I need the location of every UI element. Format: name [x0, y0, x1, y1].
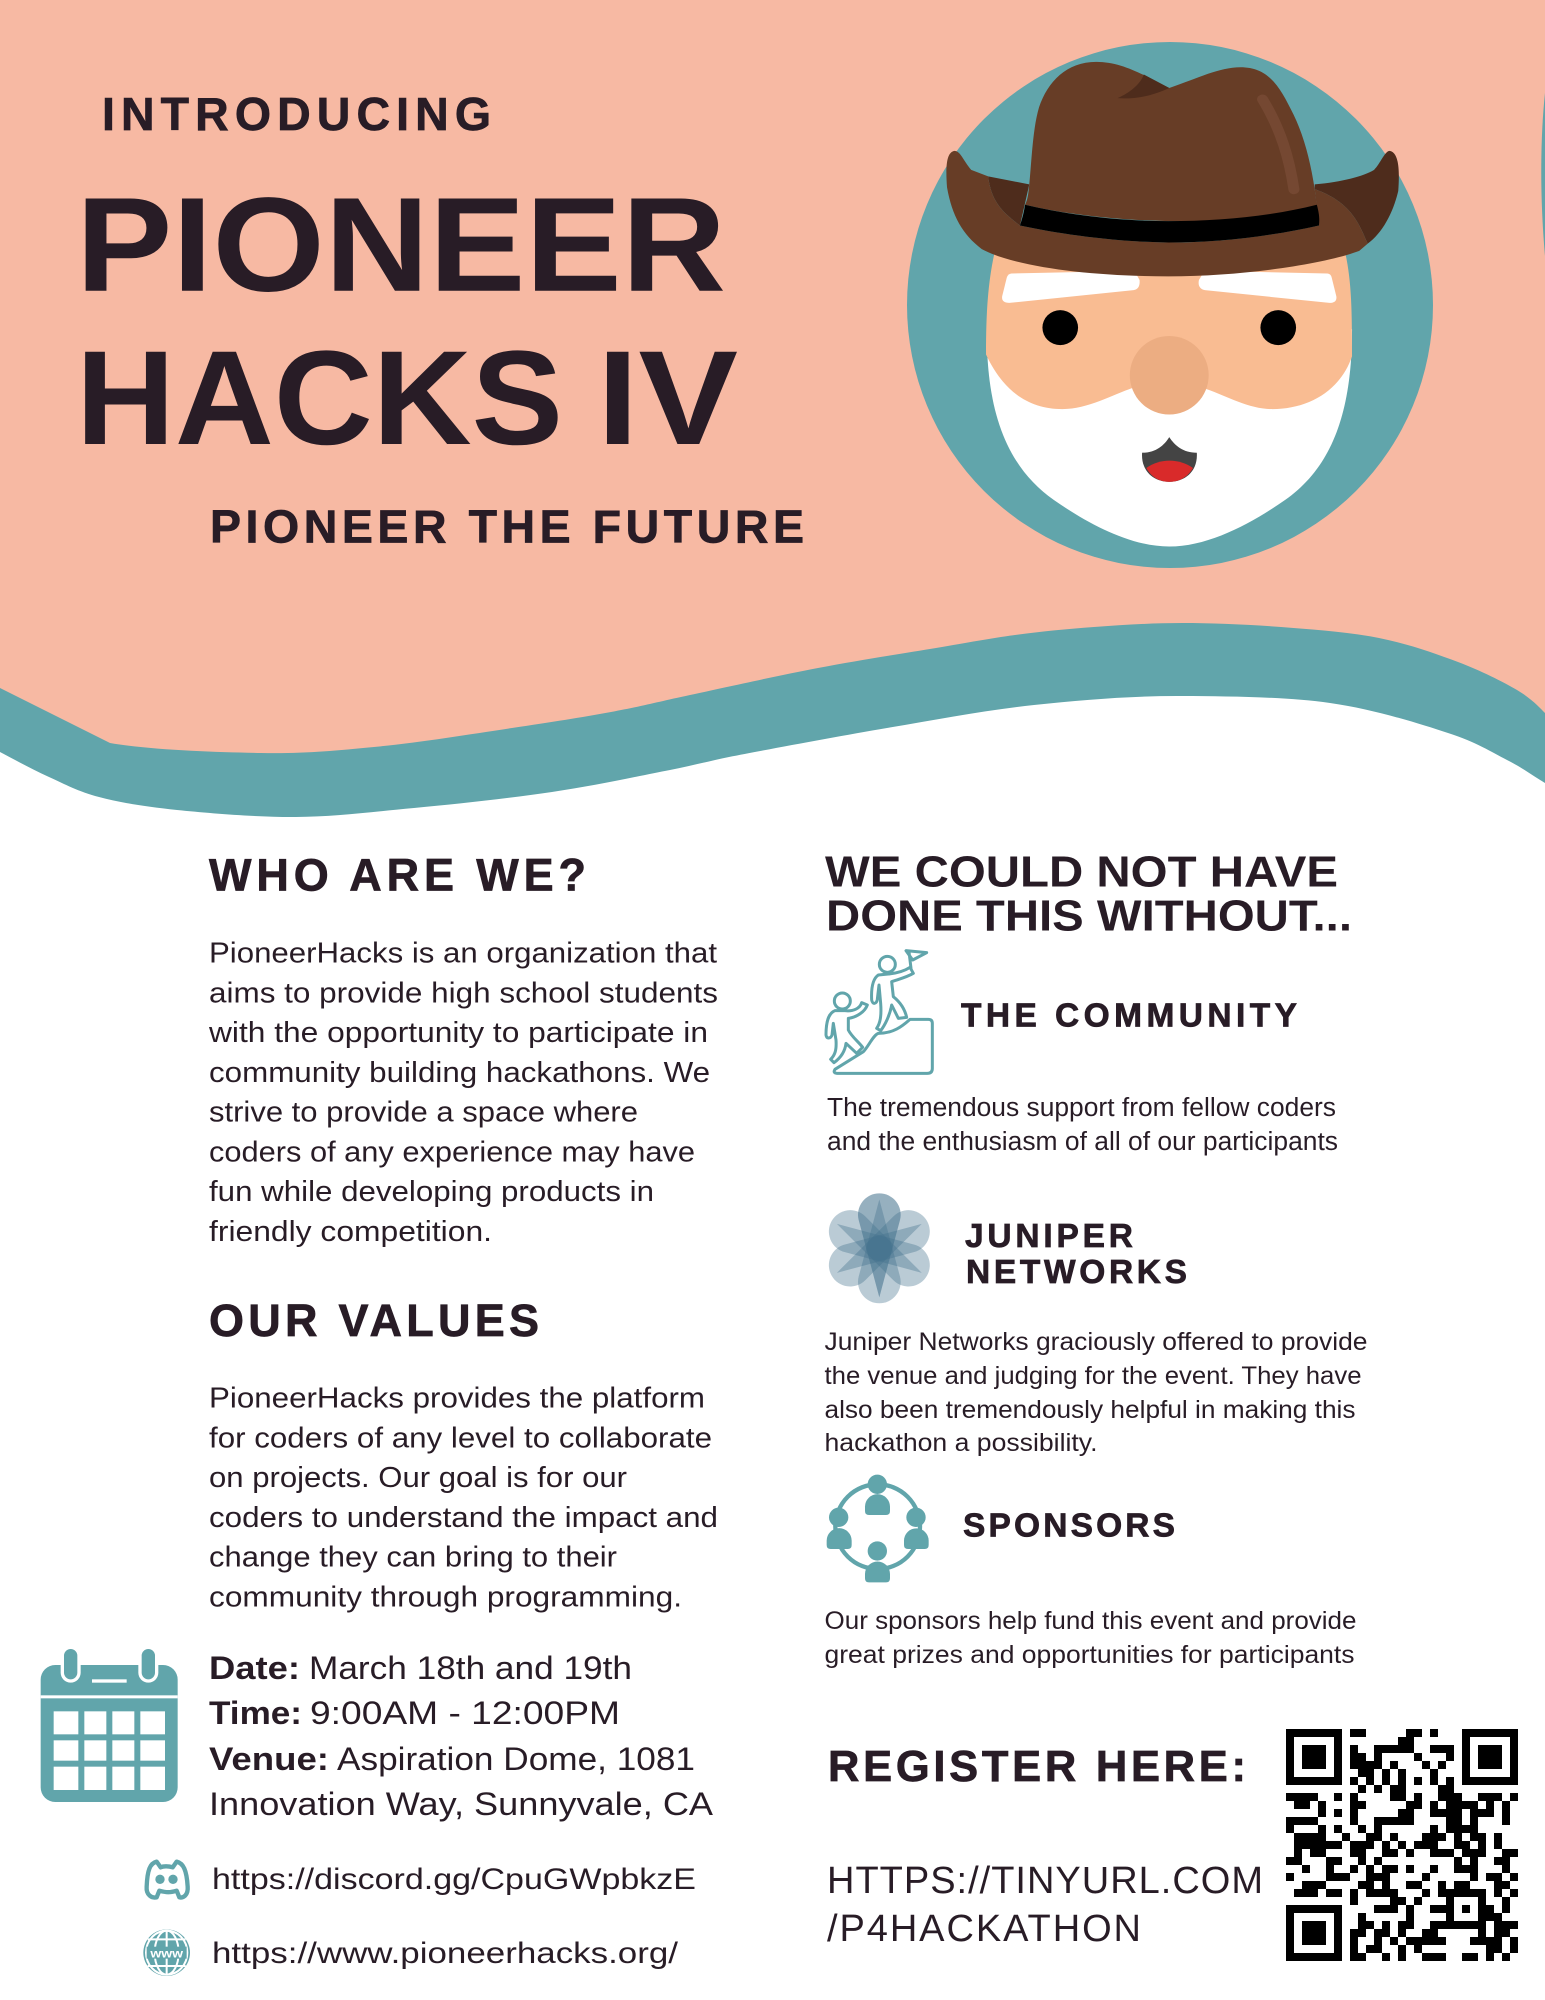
- icon: globe: [143, 1929, 190, 1976]
- event details: Innovation Way, Sunnyvale, CA: [209, 1786, 714, 1822]
- event details: Venue:: [209, 1741, 329, 1777]
- paragraph: sponsors: great prizes and opportunities for participants: [824, 1641, 1354, 1669]
- paragraph: who are we: [208, 938, 718, 1248]
- registration url: [827, 1860, 1263, 1950]
- event details: Aspiration Dome, 1081: [337, 1741, 695, 1777]
- paragraph: the community: and the enthusiasm of all of our participants: [827, 1128, 1338, 1156]
- paragraph: our values: on projects. Our goal is for our: [209, 1462, 627, 1494]
- decorative teal sliver at right edge: [1541, 93, 1545, 256]
- event details: March 18th and 19th: [309, 1650, 632, 1686]
- discord link: https://discord.gg/CpuGWpbkzE: [212, 1863, 696, 1896]
- event details: [209, 1650, 714, 1822]
- paragraph: the community: The tremendous support from fellow coders: [827, 1094, 1336, 1122]
- subheading: sponsors: SPONSORS: [963, 1508, 1175, 1544]
- subheading: juniper networks: NETWORKS: [966, 1254, 1187, 1291]
- icon: sponsors network: [827, 1475, 929, 1582]
- paragraph: our values: community through programming.: [209, 1581, 682, 1613]
- heading: acknowledgements: WE COULD NOT HAVE: [825, 849, 1338, 897]
- paragraph: juniper networks: Juniper Networks graciously offered to provide: [824, 1328, 1368, 1356]
- heading: register here: REGISTER HERE:: [828, 1743, 1246, 1791]
- paragraph: juniper networks: hackathon a possibility.: [824, 1429, 1098, 1457]
- paragraph: our values: coders to understand the impact and: [209, 1502, 718, 1534]
- title: IV: [597, 324, 738, 473]
- icon: juniper flower logo: [821, 1193, 938, 1303]
- paragraph: our values: [209, 1382, 718, 1613]
- paragraph: juniper networks: [824, 1328, 1368, 1457]
- paragraph: who are we: friendly competition.: [209, 1216, 492, 1248]
- paragraph: sponsors: Our sponsors help fund this event and provide: [824, 1607, 1356, 1635]
- paragraph: our values: change they can bring to their: [209, 1542, 617, 1574]
- title: [76, 171, 738, 473]
- paragraph: the community: [827, 1094, 1338, 1156]
- event details: Date:: [209, 1650, 300, 1686]
- icon: discord: [147, 1862, 188, 1898]
- icon: globe: www: [149, 1946, 184, 1960]
- paragraph: juniper networks: also been tremendously helpful in making this: [824, 1396, 1356, 1424]
- event details: 9:00AM - 12:00PM: [310, 1695, 620, 1731]
- title: HACKS: [76, 324, 563, 473]
- heading: our values: OUR VALUES: [209, 1295, 539, 1346]
- intro label: INTRODUCING: [102, 88, 491, 140]
- mascot: pioneer face with hat: [907, 42, 1433, 568]
- paragraph: who are we: aims to provide high school students: [209, 977, 718, 1009]
- paragraph: sponsors: [824, 1607, 1356, 1669]
- paragraph: juniper networks: the venue and judging for the event. They have: [824, 1362, 1362, 1390]
- paragraph: our values: PioneerHacks provides the platform: [209, 1382, 705, 1414]
- icon: climbers helping: [826, 951, 932, 1073]
- paragraph: who are we: PioneerHacks is an organization that: [209, 938, 717, 970]
- icon: calendar: [41, 1647, 178, 1802]
- paragraph: who are we: coders of any experience may have: [209, 1136, 695, 1168]
- teal wave band: [0, 600, 1545, 817]
- subheading: juniper networks: [965, 1218, 1187, 1291]
- registration url: /P4HACKATHON: [827, 1908, 1141, 1950]
- heading: acknowledgements: [825, 849, 1352, 941]
- subheading: the community: THE COMMUNITY: [961, 998, 1297, 1035]
- paragraph: our values: for coders of any level to collaborate: [209, 1422, 712, 1454]
- paragraph: who are we: fun while developing products in: [209, 1176, 654, 1208]
- paragraph: who are we: community building hackathons. We: [209, 1057, 710, 1089]
- tagline: PIONEER THE FUTURE: [210, 501, 804, 553]
- heading: acknowledgements: DONE THIS WITHOUT...: [826, 893, 1352, 941]
- website link: https://www.pioneerhacks.org/: [212, 1937, 679, 1970]
- QR code: [1286, 1733, 1518, 1957]
- title: PIONEER: [76, 171, 726, 320]
- heading: who are we: WHO ARE WE?: [209, 850, 586, 900]
- paragraph: who are we: with the opportunity to participate in: [208, 1017, 708, 1049]
- subheading: juniper networks: JUNIPER: [965, 1218, 1133, 1255]
- event details: Time:: [209, 1695, 302, 1731]
- paragraph: who are we: strive to provide a space where: [209, 1096, 638, 1128]
- peach header background: [0, 0, 1545, 753]
- registration url: HTTPS://TINYURL.COM: [827, 1860, 1263, 1902]
